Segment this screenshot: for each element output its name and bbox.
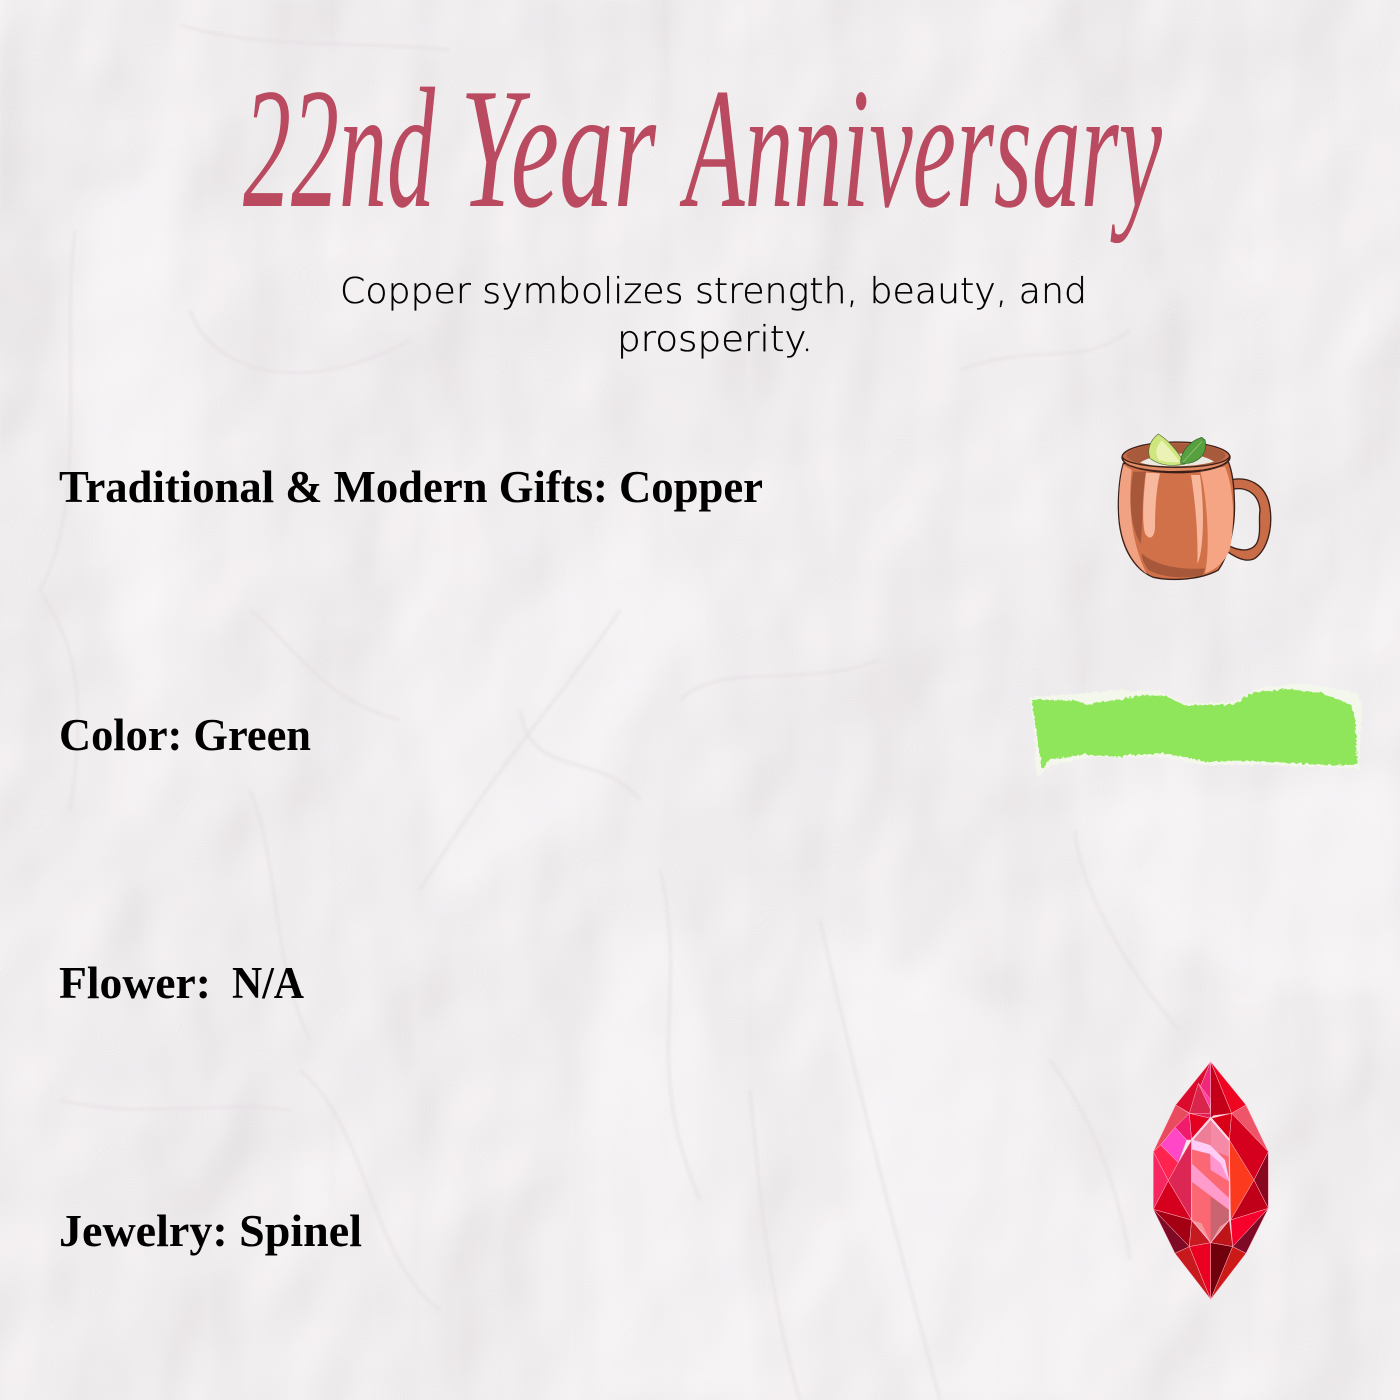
gem table	[1192, 1118, 1229, 1243]
paper edge	[1030, 684, 1362, 776]
mug right highlight	[1200, 467, 1233, 573]
label: flower	[59, 958, 304, 1008]
label: flower: N/A	[232, 958, 304, 1008]
mug body	[1118, 462, 1235, 579]
label: traditional and modern gifts: Traditional & Modern Gifts: Copper	[59, 462, 763, 512]
mug rim	[1122, 442, 1230, 473]
mint leaf	[1181, 437, 1206, 464]
icon: torn green paper	[1030, 684, 1362, 776]
label: flower: Flower:	[59, 958, 211, 1008]
mug left highlight	[1119, 465, 1147, 574]
mug handle	[1223, 479, 1271, 560]
title: 22nd	[243, 54, 436, 244]
subtitle text: prosperity.	[617, 319, 813, 360]
lime wedge	[1149, 434, 1185, 465]
subtitle text	[340, 271, 1087, 360]
icon: copper mug	[1118, 434, 1271, 579]
mug shadow stripes	[1131, 472, 1146, 544]
title: Year	[460, 54, 657, 244]
label: color: Color: Green	[59, 710, 311, 760]
label: jewelry: Jewelry: Spinel	[59, 1206, 362, 1256]
title	[243, 54, 1162, 244]
subtitle text: Copper symbolizes strength, beauty, and	[340, 271, 1087, 312]
paper fill	[1032, 689, 1357, 769]
rim front	[1122, 456, 1230, 472]
icon: spinel gem	[1153, 1062, 1268, 1299]
ice	[1140, 454, 1214, 466]
table outline	[1192, 1118, 1229, 1140]
